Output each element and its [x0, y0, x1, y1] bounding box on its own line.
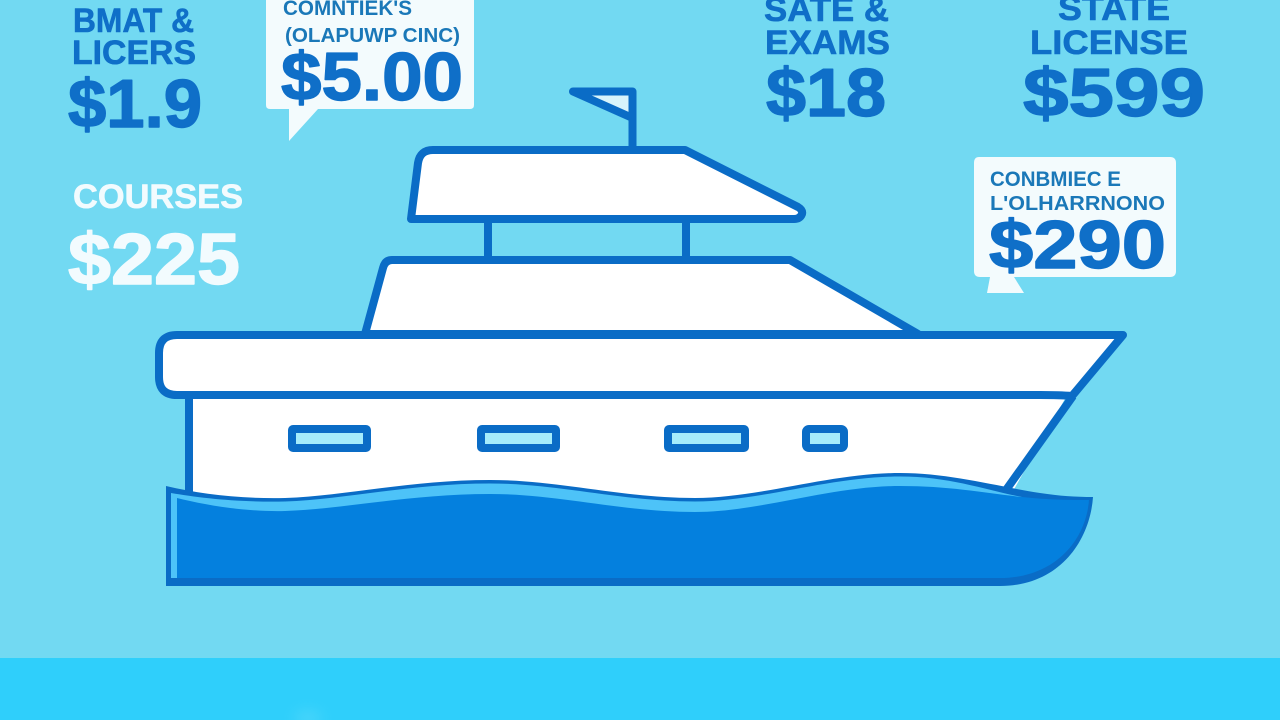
callout: right price: L'OLHARRNONO — [990, 193, 1165, 215]
water glow — [294, 711, 322, 720]
cost label: boat license: $1.9 — [68, 66, 202, 142]
hull waterline — [166, 473, 1093, 586]
cost label: boat license — [68, 2, 202, 142]
water highlight — [171, 476, 1022, 578]
main deck — [159, 335, 1123, 396]
cost label: state exams: $18 — [766, 55, 886, 131]
boat illustration — [159, 92, 1123, 586]
windows — [292, 429, 844, 448]
callout: right price — [974, 157, 1176, 293]
water fill — [177, 486, 1089, 578]
cost label: state license: $599 — [1023, 55, 1205, 131]
hull outlines — [189, 396, 1073, 492]
upper cabin — [411, 150, 802, 219]
flag and mast — [573, 92, 632, 150]
callout: top left price: $5.00 — [281, 39, 463, 115]
water band — [0, 658, 1280, 720]
cost label: courses — [68, 178, 243, 300]
cost label: state license: LICENSE — [1030, 24, 1188, 62]
callout bubble — [974, 157, 1176, 293]
cost label: courses: COURSES — [73, 178, 243, 216]
cost label: boat license: LICERS — [72, 34, 196, 72]
cabin supports — [484, 220, 690, 260]
callout: right price: CONBMIEC E — [990, 168, 1121, 191]
cost label: state license — [1023, 0, 1205, 131]
cost label: state exams — [764, 0, 890, 131]
callout bubble — [266, 0, 474, 141]
callout: top left price — [266, 0, 474, 141]
cost label: state exams: EXAMS — [765, 24, 890, 62]
hull body — [188, 395, 1066, 500]
callout: right price: $290 — [989, 207, 1166, 283]
cost label: courses: $225 — [68, 220, 240, 300]
cost label: boat license: BMAT & — [73, 2, 194, 40]
callout: top left price: (OLAPUWP CINC) — [285, 25, 460, 47]
lower cabin — [365, 260, 918, 334]
